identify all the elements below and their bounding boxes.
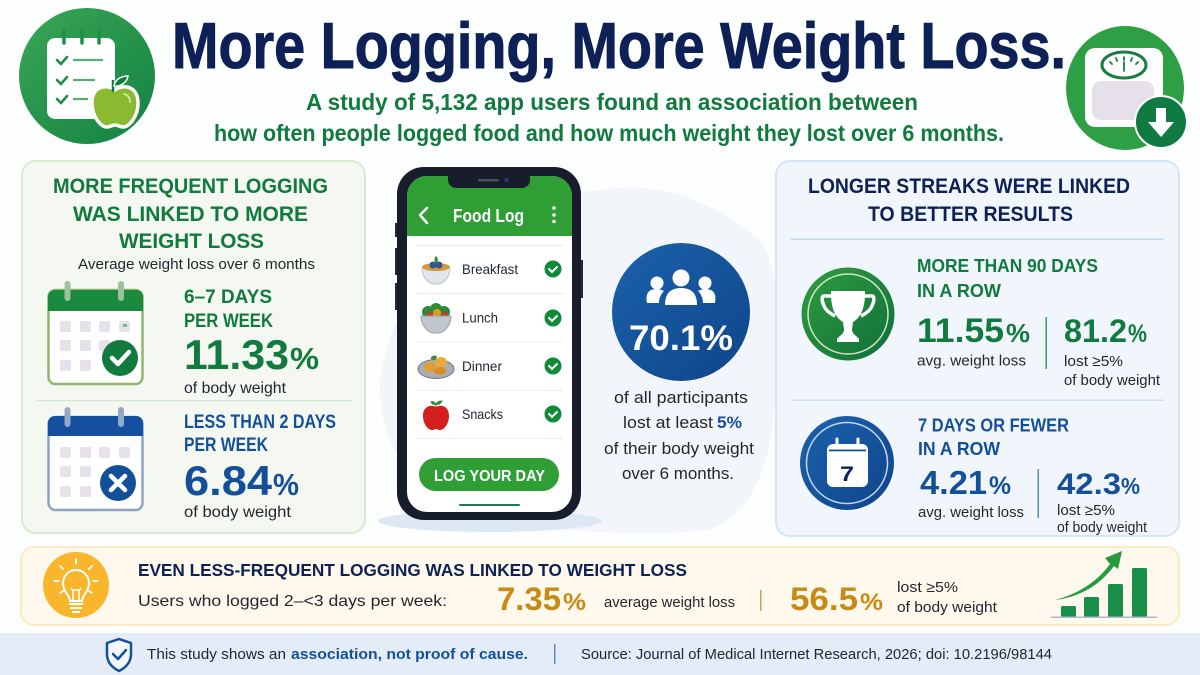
stat: 7 days or fewer: avg. weight loss — [918, 504, 1024, 521]
stat: more than 90 days: % — [1006, 318, 1030, 348]
stat: more than 90 days: MORE THAN 90 DAYS — [917, 255, 1098, 276]
stat: less than 2 days per week: % — [273, 467, 299, 502]
stat: 6-7 days per week: 11.33 — [184, 331, 289, 378]
stat: 7 days or fewer: % — [989, 472, 1011, 500]
stat: 56.5%: of body weight — [897, 600, 997, 616]
app header — [407, 176, 572, 236]
panel: longer streaks — [776, 161, 1179, 536]
text: participants statement: of all participants — [614, 389, 748, 407]
stat: less than 2 days per week: LESS THAN 2 DAYS — [184, 412, 336, 433]
stat: more than 90 days: of body weight — [1064, 372, 1161, 389]
stat: 7.35%: 7.35 — [497, 581, 561, 617]
stat: 7 days or fewer: 7 DAYS OR FEWER — [918, 414, 1069, 436]
panel heading — [808, 175, 1130, 226]
food row: dinner: Dinner — [462, 358, 502, 374]
icon: calendar with cross — [48, 410, 143, 510]
stat: 7 days or fewer: IN A ROW — [918, 438, 1001, 459]
panel heading: MORE FREQUENT LOGGING — [53, 175, 328, 198]
panel: less-frequent logging banner — [21, 547, 1179, 625]
stat: 7 days or fewer — [918, 414, 1147, 536]
footer note: association, not proof of cause. — [291, 646, 528, 663]
chart: rising bars with arrow — [1051, 551, 1157, 618]
text: participants statement: lost at least — [623, 414, 713, 432]
panel: more frequent logging — [22, 161, 365, 533]
subtitle: A study of 5,132 app users found an association between — [306, 89, 918, 115]
panel subheading: Average weight loss over 6 months — [78, 257, 315, 273]
background blob — [380, 187, 777, 533]
stat: 6-7 days per week — [184, 287, 319, 397]
phone mockup — [395, 167, 583, 520]
stat: 7.35%: average weight loss — [604, 595, 735, 611]
icon: shield — [107, 639, 131, 671]
stat: more than 90 days: % — [1128, 320, 1147, 348]
source citation: Source: Journal of Medical Internet Research, 2026; doi: 10.2196/98144 — [581, 647, 1052, 663]
stat: more than 90 days: 11.55 — [917, 312, 1004, 350]
icon: trophy — [802, 268, 894, 360]
title: More Logging, More Weight Loss. — [172, 9, 1066, 82]
text: participants statement: 5% — [717, 414, 742, 432]
icon: people — [647, 270, 715, 305]
stat: more than 90 days: lost ≥5% — [1064, 353, 1123, 370]
text: participants statement: over 6 months. — [622, 465, 734, 483]
button: log your day — [419, 458, 559, 491]
subtitle — [214, 89, 1004, 146]
stat: 6-7 days per week: PER WEEK — [184, 311, 273, 332]
text: participants statement — [604, 389, 754, 483]
stat: 56.5%: % — [860, 589, 883, 616]
panel heading — [53, 175, 328, 253]
stat: 7 days or fewer: of body weight — [1057, 520, 1147, 536]
food row: breakfast: Breakfast — [462, 261, 518, 277]
food row: snacks: Snacks — [462, 406, 503, 422]
stat: 7.35% — [497, 581, 735, 617]
food row: lunch: Lunch — [462, 310, 498, 326]
stat: 7 days or fewer: lost ≥5% — [1057, 503, 1115, 519]
stat: less than 2 days per week: of body weight — [184, 504, 292, 521]
header icon: checklist and apple — [19, 8, 155, 144]
stat circle: 70.1% — [612, 243, 750, 381]
food row: snacks — [423, 401, 562, 430]
stat: more than 90 days: IN A ROW — [917, 280, 1002, 301]
food row: breakfast — [422, 256, 562, 284]
panel heading: WAS LINKED TO MORE — [73, 203, 308, 226]
stat: more than 90 days: avg. weight loss — [917, 352, 1026, 370]
subtitle: how often people logged food and how much weight they lost over 6 months. — [214, 120, 1004, 146]
panel heading: WEIGHT LOSS — [119, 230, 264, 253]
icon: calendar seven — [800, 416, 894, 510]
footer note — [147, 646, 528, 663]
banner heading: EVEN LESS-FREQUENT LOGGING WAS LINKED TO WEIGHT LOSS — [138, 560, 687, 580]
icon: calendar with check — [48, 284, 143, 384]
food row: dinner — [418, 356, 562, 378]
phone mockup: Food Log — [453, 206, 524, 226]
button: log your day: LOG YOUR DAY — [434, 468, 546, 485]
stat: 7 days or fewer: 42.3 — [1057, 468, 1121, 501]
stat: 7 days or fewer: 4.21 — [920, 464, 987, 501]
banner label: Users who logged 2–<3 days per week: — [138, 593, 447, 610]
stat: more than 90 days — [917, 255, 1161, 389]
icon: light bulb — [43, 552, 109, 618]
stat: 56.5%: 56.5 — [790, 581, 858, 617]
stat: less than 2 days per week: 6.84 — [184, 457, 273, 504]
stat: 7 days or fewer: % — [1121, 473, 1140, 499]
panel heading: TO BETTER RESULTS — [868, 203, 1073, 226]
stat: 6-7 days per week: of body weight — [184, 380, 287, 397]
stat: 6-7 days per week: % — [290, 341, 319, 376]
stat: 6-7 days per week: 6–7 DAYS — [184, 287, 272, 308]
phone shadow — [378, 510, 602, 532]
text: participants statement: of their body weight — [604, 440, 754, 458]
footer bar — [0, 633, 1200, 675]
stat circle: 70.1%: 70.1% — [629, 319, 733, 358]
stat: less than 2 days per week — [184, 412, 336, 521]
stat: less than 2 days per week: PER WEEK — [184, 435, 268, 456]
stat: 56.5% — [790, 580, 997, 617]
header icon: bathroom scale with down arrow — [1066, 26, 1187, 150]
stat: 7.35%: % — [563, 589, 586, 616]
icon: calendar seven: 7 — [840, 463, 854, 486]
food row: lunch — [421, 303, 562, 333]
stat: more than 90 days: 81.2 — [1064, 313, 1127, 349]
footer note: This study shows an — [147, 646, 286, 663]
stat: 56.5%: lost ≥5% — [897, 580, 958, 596]
panel heading: LONGER STREAKS WERE LINKED — [808, 175, 1130, 198]
